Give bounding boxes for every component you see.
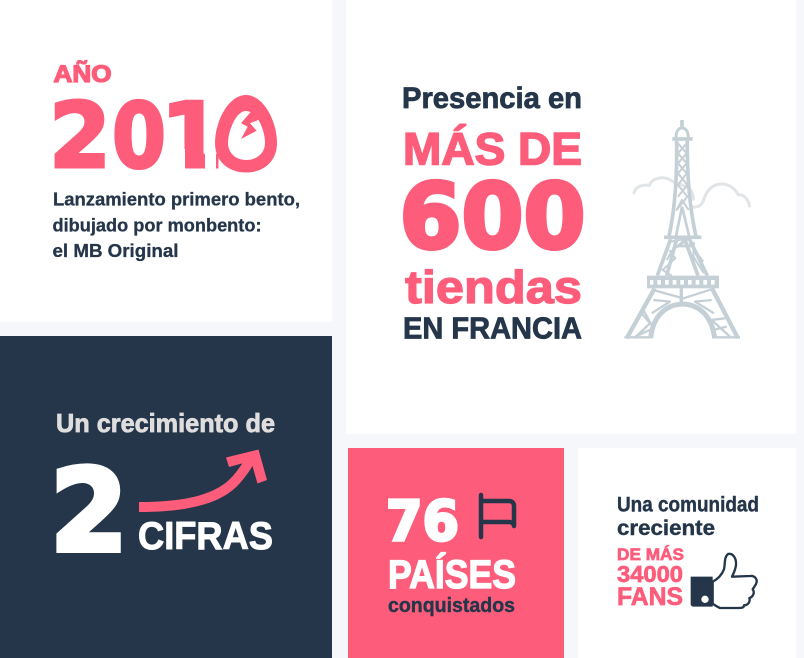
- text: en francia: EN FRANCIA: [403, 310, 582, 346]
- text: de más 34000 fans: 34000: [617, 561, 683, 587]
- text: una comunidad creciente: Una comunidad: [617, 494, 759, 516]
- text: de más 34000 fans: [617, 545, 684, 611]
- icon: cracked egg zero: [215, 95, 277, 172]
- icon: eiffel tower with clouds: [624, 120, 749, 338]
- text: países: PAÍSES: [388, 552, 516, 597]
- panel: comunidad: [578, 448, 796, 658]
- text: una comunidad creciente: creciente: [617, 517, 715, 540]
- text: conquistados: conquistados: [388, 595, 515, 617]
- text: presencia en: Presencia en: [402, 82, 582, 115]
- number: 76: 76: [386, 489, 459, 553]
- text: más de: MÁS DE: [403, 124, 582, 174]
- text block: lanzamiento: el MB Original: [52, 241, 178, 261]
- text: cifras: CIFRAS: [138, 515, 273, 558]
- heading: 201: 0: [112, 84, 166, 189]
- heading: 201: 1: [160, 84, 223, 189]
- text: un crecimiento de: Un crecimiento de: [56, 408, 275, 438]
- text: de más 34000 fans: DE MÁS: [617, 545, 684, 564]
- text block: lanzamiento: [52, 190, 300, 261]
- icon: thumbs up: [691, 554, 757, 608]
- heading: 201: [49, 84, 223, 189]
- panel: presencia en francia: [346, 0, 796, 434]
- heading: 201: 2: [49, 84, 111, 189]
- panel: países: [348, 448, 564, 658]
- text: tiendas: tiendas: [405, 261, 582, 313]
- icon: flag: [481, 495, 514, 537]
- arrow: growth: [139, 450, 267, 507]
- panel: crecimiento: [0, 336, 332, 658]
- text: de más 34000 fans: FANS: [617, 583, 683, 611]
- panel: año 2010: [0, 0, 332, 322]
- number: 2: 2: [50, 444, 128, 578]
- text block: lanzamiento: dibujado por monbento:: [52, 216, 262, 236]
- text: una comunidad creciente: [617, 494, 759, 540]
- heading: año: AÑO: [54, 60, 112, 88]
- number: 600: 600: [400, 164, 586, 270]
- text block: lanzamiento: Lanzamiento primero bento,: [53, 190, 300, 210]
